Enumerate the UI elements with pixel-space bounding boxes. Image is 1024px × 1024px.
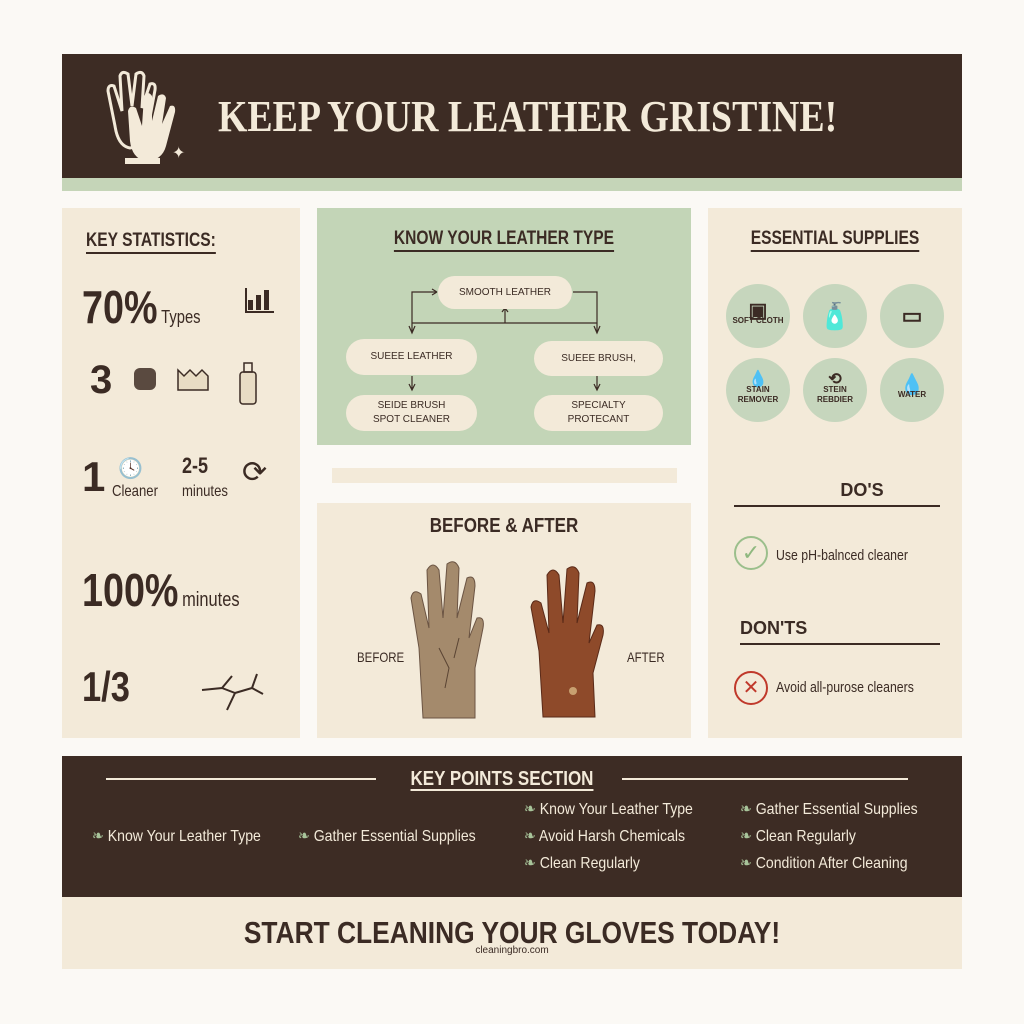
panel: essential supplies: WATER xyxy=(898,390,926,399)
supply icons: SOFT CLOTH xyxy=(732,316,784,325)
stat 1 and 2-5: 2-5 xyxy=(182,453,208,478)
icon: gloves xyxy=(106,70,185,164)
panel: key points: Clean Regularly xyxy=(540,855,640,872)
supply icons xyxy=(726,284,790,348)
panel: key points: Gather Essential Supplies xyxy=(756,801,918,818)
stat 3: 3 xyxy=(90,358,112,402)
heading: BEFORE & AFTER xyxy=(430,515,578,537)
title: KEEP YOUR LEATHER GRISTINE! xyxy=(218,92,837,141)
do's: DO'S xyxy=(840,480,884,500)
panel: key points: Know Your Leather Type xyxy=(540,801,693,818)
icon: crack xyxy=(202,674,264,710)
panel: key points: Clean Regularly xyxy=(756,828,856,845)
panel: essential supplies: 🧴 xyxy=(819,301,851,331)
stat 1 and 2-5: 1 xyxy=(82,453,105,500)
panel: key points: Avoid Harsh Chemicals xyxy=(539,828,685,845)
stat 1 and 2-5: ⟳ xyxy=(242,456,267,489)
stat 100%: 100% minutes xyxy=(82,564,240,616)
footer call to action: cleaningbro.com xyxy=(475,945,549,956)
glove after xyxy=(530,566,604,718)
panel: essential supplies: STEIN xyxy=(823,385,847,394)
panel: essential supplies: ✕ xyxy=(743,677,759,699)
panel: know your leather type: SPOT CLEANER xyxy=(373,414,450,425)
stat 1 and 2-5: 🕓 xyxy=(118,458,143,480)
stat 1 and 2-5: Cleaner xyxy=(112,483,158,500)
panel: key points: Condition After Cleaning xyxy=(756,855,908,872)
panel: key points: Gather Essential Supplies xyxy=(314,828,476,845)
don'ts xyxy=(740,618,940,645)
stat 1 and 2-5: minutes xyxy=(182,483,228,500)
panel: essential supplies: STAIN xyxy=(746,385,770,394)
don'ts: DON'TS xyxy=(740,618,807,638)
panel: essential supplies: ⟲ xyxy=(828,371,842,388)
stat 1 and 2-5 xyxy=(82,453,267,500)
panel: essential supplies: ✓ xyxy=(742,540,760,565)
panel: essential supplies: 💧 xyxy=(748,371,768,388)
panel: know your leather type xyxy=(317,208,691,445)
panel: know your leather type: SUEEE BRUSH, xyxy=(561,352,636,364)
panel: key statistics xyxy=(62,208,300,738)
panel: essential supplies: REBDIER xyxy=(817,395,853,404)
footer call to action xyxy=(62,897,962,969)
panel: essential supplies xyxy=(708,208,962,738)
heading: KNOW YOUR LEATHER TYPE xyxy=(394,228,614,249)
stat 1/3: 1/3 xyxy=(82,663,130,710)
panel: essential supplies: Use pH-balnced cleaner xyxy=(776,547,908,564)
supply icons: ▣ xyxy=(749,300,767,322)
flow arrows xyxy=(408,288,600,392)
panel: know your leather type: PROTECANT xyxy=(568,414,629,425)
icon: bar chart xyxy=(245,288,274,313)
panel: essential supplies: Avoid all-purose cleaners xyxy=(776,679,914,696)
panel: know your leather type: SPECIALTY xyxy=(571,400,626,411)
panel: essential supplies: ▭ xyxy=(902,303,922,328)
do's xyxy=(734,480,940,507)
panel: know your leather type: SMOOTH LEATHER xyxy=(459,286,551,298)
footer call to action: START CLEANING YOUR GLOVES TODAY! xyxy=(244,915,780,950)
panel: before and after: BEFORE xyxy=(357,649,404,665)
panel: before and after: AFTER xyxy=(627,649,665,665)
stat 70%: 70% Types xyxy=(82,281,201,333)
panel: key points: Know Your Leather Type xyxy=(108,828,261,845)
glove before xyxy=(410,561,484,718)
icons: supplies xyxy=(134,362,257,405)
icon: gloves: ✦ xyxy=(172,145,185,162)
heading: KEY POINTS SECTION xyxy=(411,768,593,790)
panel: essential supplies: 💧 xyxy=(900,374,924,396)
panel: know your leather type: SEIDE BRUSH xyxy=(378,400,445,411)
heading: key statistics: KEY STATISTICS: xyxy=(86,230,216,251)
panel: essential supplies: REMOVER xyxy=(738,395,778,404)
heading: ESSENTIAL SUPPLIES xyxy=(751,228,919,249)
panel: know your leather type: SUEEE LEATHER xyxy=(370,351,453,362)
header xyxy=(62,54,962,178)
panel: key points xyxy=(62,756,962,897)
panel: before and after xyxy=(317,503,691,738)
